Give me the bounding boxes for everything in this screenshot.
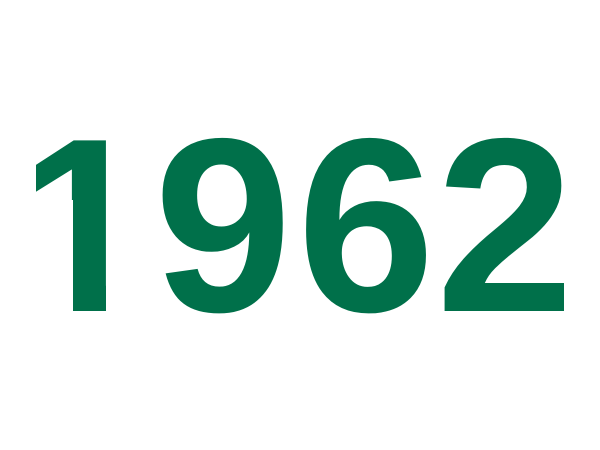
- title: year 1962: 1962: [14, 86, 574, 364]
